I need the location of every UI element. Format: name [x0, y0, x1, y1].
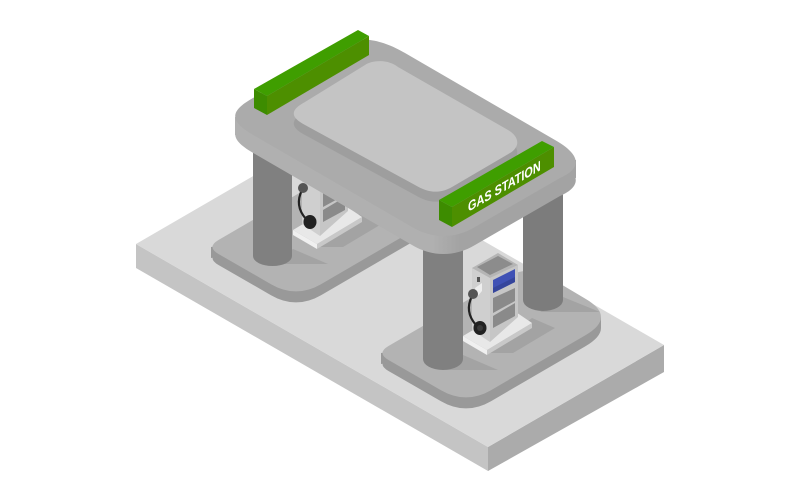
canopy top — [235, 39, 576, 236]
front pillar — [423, 230, 463, 370]
right pillar — [523, 180, 563, 311]
front pump island — [381, 271, 601, 408]
sign text: GAS STATION — [468, 157, 541, 215]
back green sign — [254, 30, 369, 115]
nozzle and hose — [468, 277, 486, 335]
front green sign — [439, 141, 554, 227]
front fuel pump — [463, 253, 532, 355]
ground slab — [136, 142, 664, 471]
pump panels — [493, 288, 515, 328]
canopy — [235, 39, 576, 254]
left fuel pump — [293, 159, 362, 249]
canopy raised panel — [294, 61, 517, 202]
pump body — [472, 253, 518, 342]
left pillar — [253, 140, 292, 266]
pump base plate — [463, 308, 532, 355]
canopy side — [235, 57, 576, 254]
left pump island — [211, 165, 431, 302]
pump screen — [493, 269, 515, 293]
